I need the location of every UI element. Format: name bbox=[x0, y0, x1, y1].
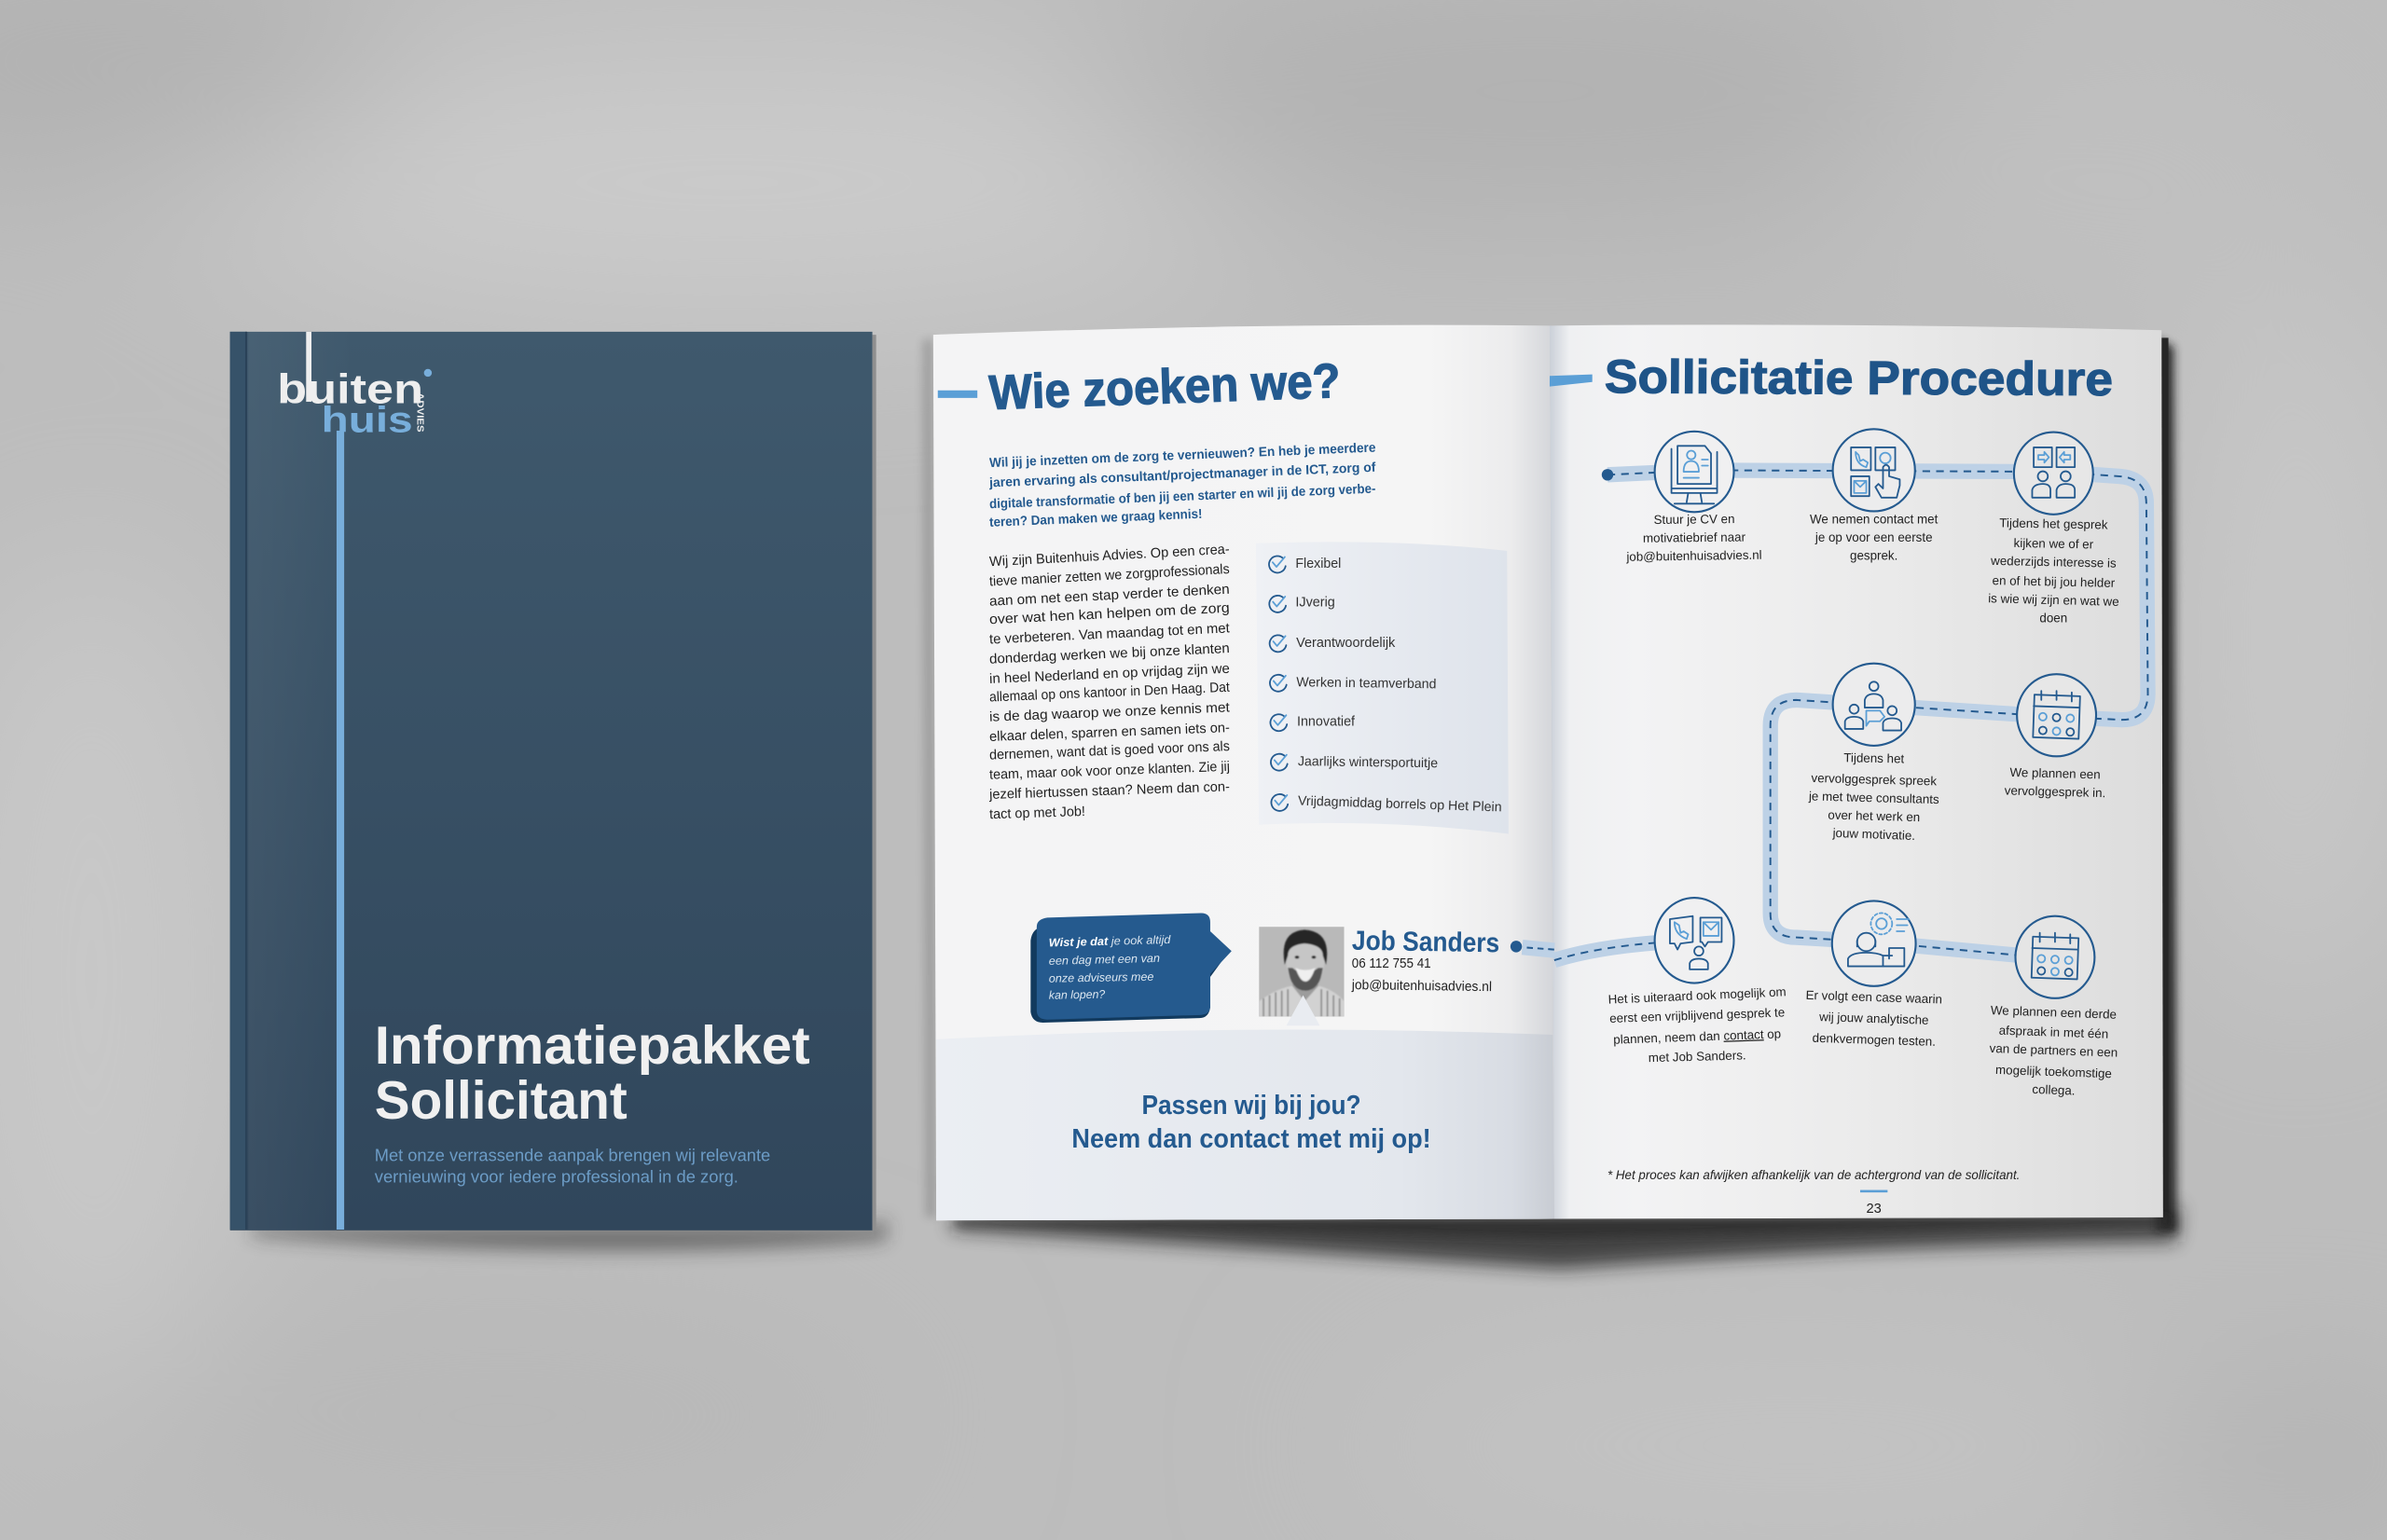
step 3 text: kijken we of er bbox=[2014, 536, 2094, 551]
body text: over wat hen kan helpen om de zorg bbox=[989, 601, 1230, 627]
icon: CV on monitor bbox=[1655, 432, 1734, 512]
step 6 text: van de partners en een bbox=[1989, 1041, 2118, 1060]
body text: dernemen, want dat is goed voor ons als bbox=[989, 739, 1230, 763]
intro text: Wil jij je inzetten om de zorg te vernieuwen? En heb je meerdere bbox=[989, 441, 1376, 471]
body text bbox=[988, 543, 1231, 822]
contact: Job Sanders bbox=[1351, 926, 1500, 995]
icon: contact channels bbox=[1833, 429, 1915, 511]
list labels: Werken in teamverband bbox=[1296, 675, 1437, 692]
body text: tieve manier zetten we zorgprofessionals bbox=[989, 562, 1230, 589]
step 4 text: We plannen een bbox=[2009, 765, 2101, 781]
cover vertical accent line bbox=[337, 431, 344, 1230]
photo notch bbox=[1287, 996, 1319, 1025]
step 8 text: met Job Sanders. bbox=[1649, 1048, 1746, 1065]
call to action bbox=[1071, 1091, 1431, 1154]
path start dots bbox=[1511, 469, 1613, 953]
icon: three people bbox=[1833, 664, 1915, 746]
cover subtitle bbox=[375, 1146, 770, 1186]
contact: Job Sanders: 06 112 755 41 bbox=[1352, 956, 1431, 971]
logo: buitenhuis advies: buiten bbox=[277, 367, 423, 413]
book shadow bbox=[922, 337, 2180, 1269]
heading dash bbox=[938, 391, 977, 398]
check icons bbox=[1269, 556, 1288, 811]
step 8: informal conversation bbox=[1607, 898, 1787, 1065]
logo: buitenhuis advies: ADVIES bbox=[414, 392, 424, 433]
step 5 text bbox=[1808, 750, 1939, 843]
step 6 text bbox=[1989, 1003, 2118, 1098]
page number: 23 bbox=[1867, 1202, 1882, 1217]
step 1 text: job@buitenhuisadvies.nl bbox=[1625, 548, 1762, 564]
step 1 text bbox=[1625, 512, 1762, 564]
step 5: follow-up interview bbox=[1808, 664, 1939, 843]
icon: person with phone and mail bbox=[1655, 898, 1734, 983]
step 4 text: vervolggesprek in. bbox=[2005, 783, 2106, 800]
procedure path bbox=[1523, 470, 2148, 960]
step 1 text: Stuur je CV en bbox=[1653, 512, 1735, 527]
cover shadow bbox=[252, 1217, 886, 1251]
icon: calendar bbox=[2016, 916, 2094, 998]
body text: tact op met Job! bbox=[989, 804, 1085, 822]
step 2 text bbox=[1810, 513, 1939, 563]
list labels: Jaarlijks wintersportuitje bbox=[1298, 754, 1438, 771]
step 7 text bbox=[1805, 988, 1942, 1049]
step 8 text bbox=[1607, 984, 1787, 1065]
body text: jezelf hiertussen staan? Neem dan con- bbox=[988, 779, 1230, 803]
body text: donderdag werken we bij onze klanten bbox=[989, 641, 1230, 667]
step 3 text: doen bbox=[2039, 612, 2067, 626]
heading: Sollicitatie Procedure: Sollicitatie Procedure bbox=[1605, 350, 2113, 406]
speech bubble callout: kan lopen? bbox=[1049, 988, 1105, 1002]
panel: left page bbox=[933, 325, 1554, 1220]
cover title: Informatiepakket bbox=[375, 1016, 810, 1076]
step 3: first interview bbox=[1988, 433, 2119, 626]
body text: in heel Nederland en op vrijdag zijn we bbox=[989, 662, 1230, 687]
step 2 text: je op voor een eerste bbox=[1814, 530, 1933, 544]
step 3 text: is wie wij zijn en wat we bbox=[1988, 591, 2119, 609]
portrait photo bbox=[1259, 927, 1345, 1016]
contact: Job Sanders: job@buitenhuisadvies.nl bbox=[1351, 978, 1492, 995]
step 2: first contact bbox=[1810, 429, 1939, 563]
body text: is de dag waarop we onze kennis met bbox=[989, 700, 1231, 725]
step 6 text: afspraak in met één bbox=[1999, 1024, 2108, 1041]
list labels: IJverig bbox=[1295, 596, 1335, 611]
step 5 text: vervolggesprek spreek bbox=[1811, 771, 1938, 788]
contact: Job Sanders: Job Sanders bbox=[1352, 926, 1500, 958]
list labels: Vrijdagmiddag borrels op Het Plein bbox=[1298, 794, 1502, 815]
icon: two people exchanging bbox=[2014, 433, 2093, 515]
list labels: Verantwoordelijk bbox=[1296, 636, 1396, 651]
list labels bbox=[1295, 557, 1502, 815]
step 8 text: plannen, neem dan contact op bbox=[1613, 1026, 1781, 1047]
step 7 text: wij jouw analytische bbox=[1818, 1010, 1929, 1027]
call to action: Passen wij bij jou? bbox=[1141, 1091, 1361, 1121]
body text: team, maar ook voor onze klanten. Zie jij bbox=[989, 760, 1230, 783]
logo: buitenhuis advies bbox=[277, 332, 432, 441]
speech bubble callout: Wist je dat je ook altijd bbox=[1049, 933, 1172, 949]
body text: te verbeteren. Van maandag tot en met bbox=[989, 621, 1231, 648]
cover subtitle: vernieuwing voor iedere professional in de zorg. bbox=[375, 1166, 738, 1186]
list labels: Innovatief bbox=[1297, 715, 1356, 730]
step 2 text: gesprek. bbox=[1850, 549, 1897, 563]
step 3 text: en of het bij jou helder bbox=[1992, 573, 2116, 590]
cover subtitle: Met onze verrassende aanpak brengen wij relevante bbox=[375, 1146, 770, 1165]
footnote: * Het proces kan afwijken afhankelijk van de achtergrond van de sollicitant. bbox=[1607, 1168, 2020, 1182]
body text: allemaal op ons kantoor in Den Haag. Dat bbox=[989, 681, 1231, 706]
step 1: send CV bbox=[1625, 432, 1762, 564]
step 6 text: collega. bbox=[2032, 1082, 2076, 1098]
intro text bbox=[988, 441, 1376, 530]
step 7 text: denkvermogen testen. bbox=[1812, 1031, 1936, 1049]
step 7 text: Er volgt een case waarin bbox=[1805, 988, 1942, 1006]
step 5 text: Tijdens het bbox=[1843, 750, 1905, 765]
bottom call-to-action band bbox=[936, 1030, 1554, 1220]
logo: buitenhuis advies: huis bbox=[322, 401, 413, 441]
page number bbox=[1860, 1190, 1887, 1217]
icon: calendar bbox=[2017, 674, 2096, 756]
speech bubble callout: onze adviseurs mee bbox=[1049, 970, 1154, 985]
step 3 text bbox=[1988, 516, 2119, 626]
step 7: case bbox=[1805, 901, 1942, 1049]
step 5 text: jouw motivatie. bbox=[1831, 826, 1915, 843]
body text: aan om net een stap verder te denken bbox=[989, 583, 1230, 610]
step 6 text: mogelijk toekomstige bbox=[1995, 1063, 2112, 1080]
heading: Wie zoeken we?: Wie zoeken we? bbox=[988, 354, 1342, 420]
body text: elkaar delen, sparren en samen iets on- bbox=[989, 721, 1230, 745]
call to action: Neem dan contact met mij op! bbox=[1071, 1124, 1431, 1154]
list labels: Flexibel bbox=[1295, 557, 1341, 571]
step 4: plan follow-up bbox=[2005, 674, 2106, 800]
intro text: digitale transformatie of ben jij een starter en wil jij de zorg verbe- bbox=[989, 482, 1376, 512]
step 6: third appointment bbox=[1989, 916, 2118, 1098]
step 5 text: je met twee consultants bbox=[1808, 789, 1939, 806]
heading dash bbox=[1550, 375, 1593, 387]
step 3 text: wederzijds interesse is bbox=[1990, 554, 2117, 571]
speech bubble callout bbox=[1030, 913, 1232, 1023]
cover title bbox=[375, 1016, 810, 1131]
panel: qualities list bbox=[1256, 542, 1509, 834]
step 2 text: We nemen contact met bbox=[1810, 513, 1939, 527]
step 3 text: Tijdens het gesprek bbox=[1999, 516, 2108, 531]
body text: Wij zijn Buitenhuis Advies. Op een crea- bbox=[989, 543, 1230, 570]
panel: brochure cover bbox=[230, 332, 876, 1231]
cover title: Sollicitant bbox=[375, 1071, 628, 1131]
step 6 text: We plannen een derde bbox=[1991, 1003, 2117, 1022]
step 1 text: motivatiebrief naar bbox=[1643, 530, 1746, 545]
panel: right page bbox=[1511, 324, 2163, 1219]
step 5 text: over het werk en bbox=[1828, 808, 1920, 824]
step 4 text bbox=[2005, 765, 2106, 800]
intro text: teren? Dan maken we graag kennis! bbox=[989, 507, 1203, 530]
speech bubble callout: een dag met een van bbox=[1049, 952, 1160, 968]
icon: person with gear and puzzle bbox=[1832, 901, 1916, 986]
step 8 text: Het is uiteraard ook mogelijk om bbox=[1607, 984, 1787, 1007]
intro text: jaren ervaring als consultant/projectmanager in de ICT, zorg of bbox=[988, 461, 1376, 490]
step 8 text: eerst een vrijblijvend gesprek te bbox=[1609, 1005, 1785, 1025]
